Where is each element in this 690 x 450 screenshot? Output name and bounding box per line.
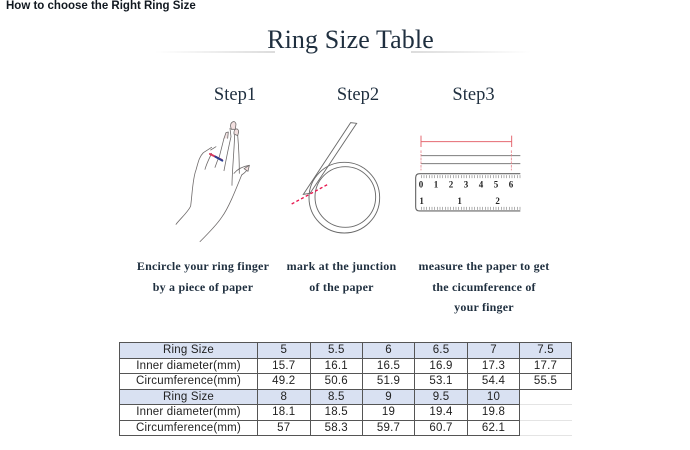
ring size table: 9.5 — [433, 391, 449, 403]
title: Ring Size Table — [267, 25, 434, 54]
step 2 caption — [286, 259, 396, 294]
ring size table: 19 — [382, 406, 395, 418]
ring size table: Circumference(mm) — [136, 375, 241, 387]
ring size table: 54.4 — [482, 375, 505, 387]
ring size table: Inner diameter(mm) — [136, 406, 241, 418]
ring size table: 50.6 — [325, 375, 348, 387]
mark line — [292, 185, 327, 204]
ruler outline — [416, 174, 520, 211]
icon: strip measured on ruler: 2 — [449, 180, 454, 190]
icon: strip measured on ruler: 4 — [479, 180, 484, 190]
ring size table: 8 — [280, 391, 287, 403]
ring size table: 7 — [490, 344, 497, 356]
icon: strip measured on ruler: 1 — [419, 196, 424, 206]
ring size table: 16.1 — [325, 360, 348, 372]
icon: strip measured on ruler — [416, 136, 520, 211]
ring size table: 5.5 — [328, 344, 345, 356]
ring size table: 18.1 — [272, 406, 295, 418]
measurement line — [421, 136, 512, 147]
icon: strip measured on ruler: 3 — [464, 180, 469, 190]
ring size table: Ring Size — [163, 344, 214, 356]
title rule right — [411, 51, 531, 53]
icon: strip measured on ruler: 1 — [434, 180, 439, 190]
step 1 heading: Step1 — [214, 85, 256, 105]
ring size table: 19.4 — [429, 406, 453, 418]
ring size table: 6 — [385, 344, 392, 356]
ring size table: 57 — [277, 422, 290, 434]
step 1 caption: by a piece of paper — [153, 280, 253, 294]
ring size table: 18.5 — [325, 406, 348, 418]
icon: paper strip looped into a circle with mark — [292, 123, 380, 233]
ring size table: Ring Size — [163, 391, 214, 403]
ring size table: 9 — [385, 391, 392, 403]
ring size table: 6.5 — [433, 344, 449, 356]
ring size table: 53.1 — [429, 375, 453, 387]
icon: strip measured on ruler: 5 — [494, 180, 499, 190]
icon: strip measured on ruler: 6 — [509, 180, 514, 190]
step 1 caption: Encircle your ring finger — [137, 259, 269, 273]
ring size table: 51.9 — [377, 375, 400, 387]
ring size table: 60.7 — [429, 422, 453, 434]
step 3 caption: the cicumference of — [432, 280, 536, 294]
page heading: How to choose the Right Ring Size — [6, 0, 196, 12]
step 2 caption: mark at the junction — [287, 259, 396, 273]
ring size table: 16.5 — [377, 360, 400, 372]
ring size table: 17.3 — [482, 360, 505, 372]
ring size table: Circumference(mm) — [136, 422, 241, 434]
ring size table: Inner diameter(mm) — [136, 360, 241, 372]
ruler numbers: 0 — [419, 180, 424, 190]
step 2 caption: of the paper — [309, 280, 374, 294]
ring size table: 58.3 — [325, 422, 348, 434]
ring size table: 10 — [487, 391, 500, 403]
step 3 caption: measure the paper to get — [418, 259, 550, 273]
step 1 caption — [137, 259, 269, 294]
ring size table: 49.2 — [272, 375, 295, 387]
step 2 heading: Step2 — [337, 85, 379, 105]
step 3 caption — [418, 259, 550, 314]
ring size table: 62.1 — [482, 422, 505, 434]
ring size table: 7.5 — [537, 344, 554, 356]
ring size table — [119, 342, 572, 436]
icon: strip measured on ruler: 1 — [457, 196, 462, 206]
ring size table: 16.9 — [429, 360, 453, 372]
paper strip — [421, 156, 520, 164]
ring size table: 59.7 — [377, 422, 400, 434]
ring size table: 19.8 — [482, 406, 505, 418]
ring size table: 8.5 — [328, 391, 345, 403]
ring size table: 15.7 — [272, 360, 295, 372]
ring size table: 55.5 — [534, 375, 557, 387]
icon: hand with paper around ring finger — [176, 122, 249, 242]
ring size table: 17.7 — [534, 360, 557, 372]
step 3 heading: Step3 — [452, 85, 495, 105]
ring size table: 5 — [280, 344, 287, 356]
step 3 caption: your finger — [454, 300, 514, 314]
title rule left — [155, 51, 275, 53]
icon: strip measured on ruler: 2 — [495, 196, 500, 206]
